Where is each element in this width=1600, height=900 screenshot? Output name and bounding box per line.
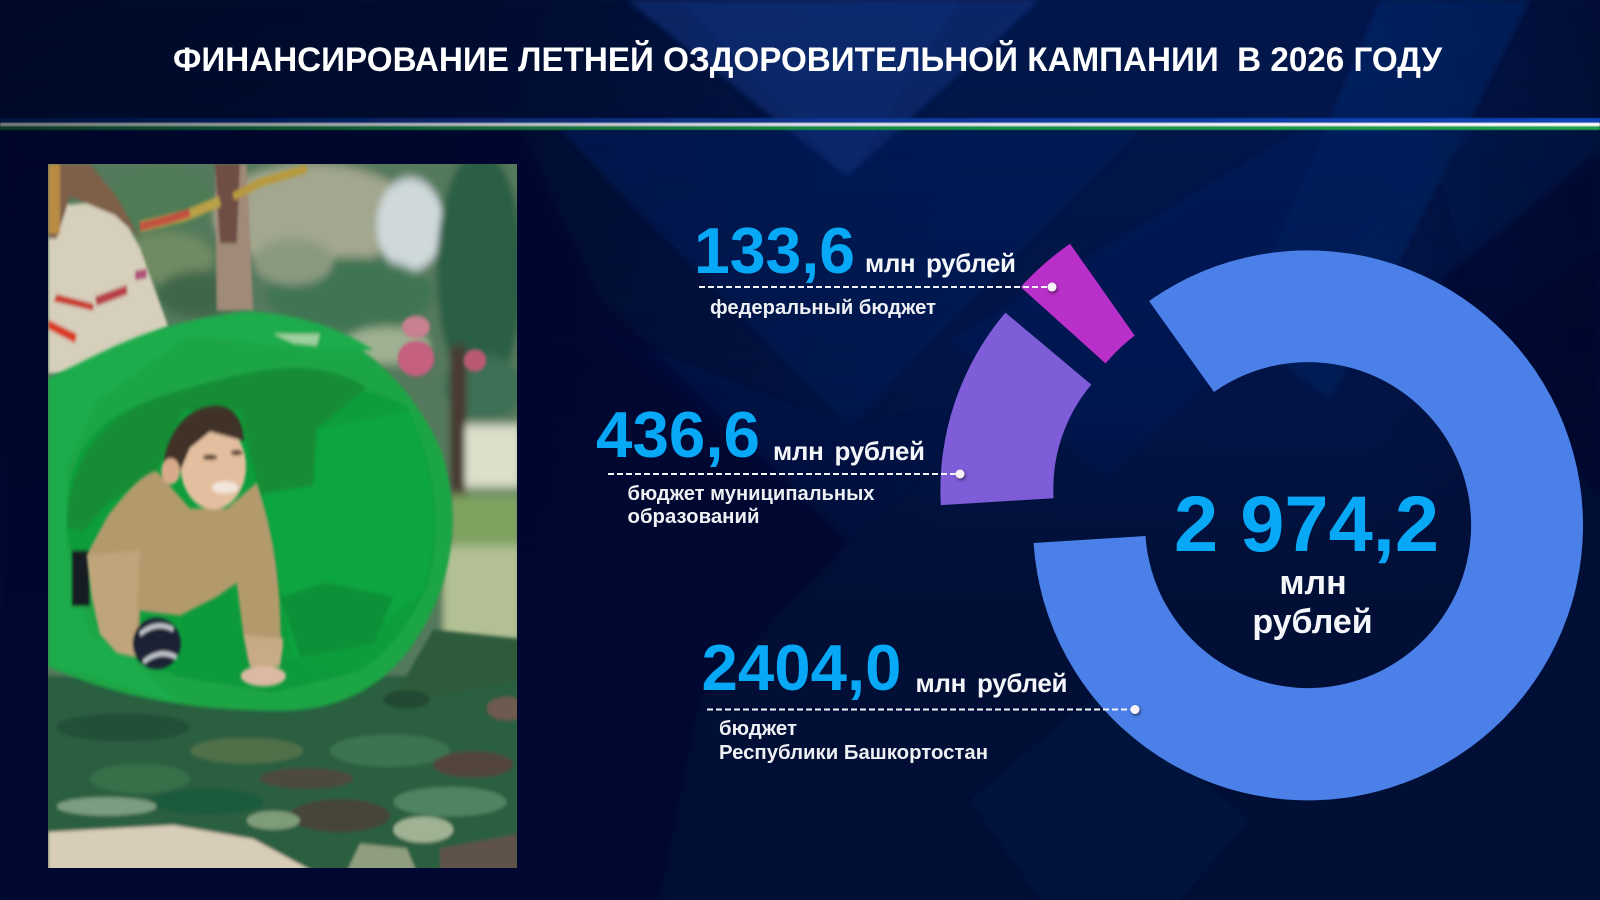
title: ФИНАНСИРОВАНИЕ ЛЕТНЕЙ ОЗДОРОВИТЕЛЬНОЙ КАМПАНИИ В 2026 ГОДУ bbox=[173, 40, 1443, 79]
segment: federal budget bbox=[1021, 244, 1135, 364]
photo: foreground grass and soil bbox=[40, 629, 530, 872]
photo: woman in light dress bbox=[48, 164, 168, 373]
donut centre total: млн bbox=[1279, 564, 1347, 602]
donut centre total: 2 974,2 bbox=[1174, 479, 1439, 568]
callout: federal budget: 133,6 bbox=[694, 214, 855, 287]
callout: republic budget bbox=[702, 631, 1140, 764]
callout: federal budget: федеральный бюджет bbox=[710, 297, 936, 319]
donut chart bbox=[940, 244, 1583, 800]
callout: municipal budget: бюджет муниципальных bbox=[628, 483, 874, 505]
photo: child bbox=[87, 406, 286, 686]
callout: republic budget: бюджет bbox=[719, 718, 797, 740]
donut centre total bbox=[1174, 479, 1439, 641]
callout: federal budget bbox=[694, 214, 1056, 319]
header tricolor line bbox=[0, 118, 1600, 130]
callout: municipal budget bbox=[596, 398, 964, 528]
callout: republic budget: Республики Башкортостан bbox=[719, 742, 988, 764]
photo: child crawling through a green play tunnel bbox=[40, 150, 530, 895]
segment: republic budget bbox=[1034, 250, 1583, 800]
callout: federal budget: млн рублей bbox=[865, 248, 1016, 278]
callout: municipal budget: образований bbox=[628, 506, 760, 528]
segment: municipal budget bbox=[940, 313, 1091, 505]
callout: republic budget: млн рублей bbox=[916, 668, 1068, 698]
photo: tree trunk and ribbons bbox=[140, 164, 307, 311]
donut centre total: рублей bbox=[1252, 603, 1373, 641]
callout: republic budget: 2404,0 bbox=[702, 631, 902, 704]
callout: municipal budget: 436,6 bbox=[596, 398, 760, 471]
photo background: trees and grass bbox=[48, 164, 517, 678]
callout: municipal budget: млн рублей bbox=[773, 436, 925, 466]
photo: green tunnel bbox=[48, 312, 453, 711]
photo: pink balloons bbox=[398, 316, 486, 376]
